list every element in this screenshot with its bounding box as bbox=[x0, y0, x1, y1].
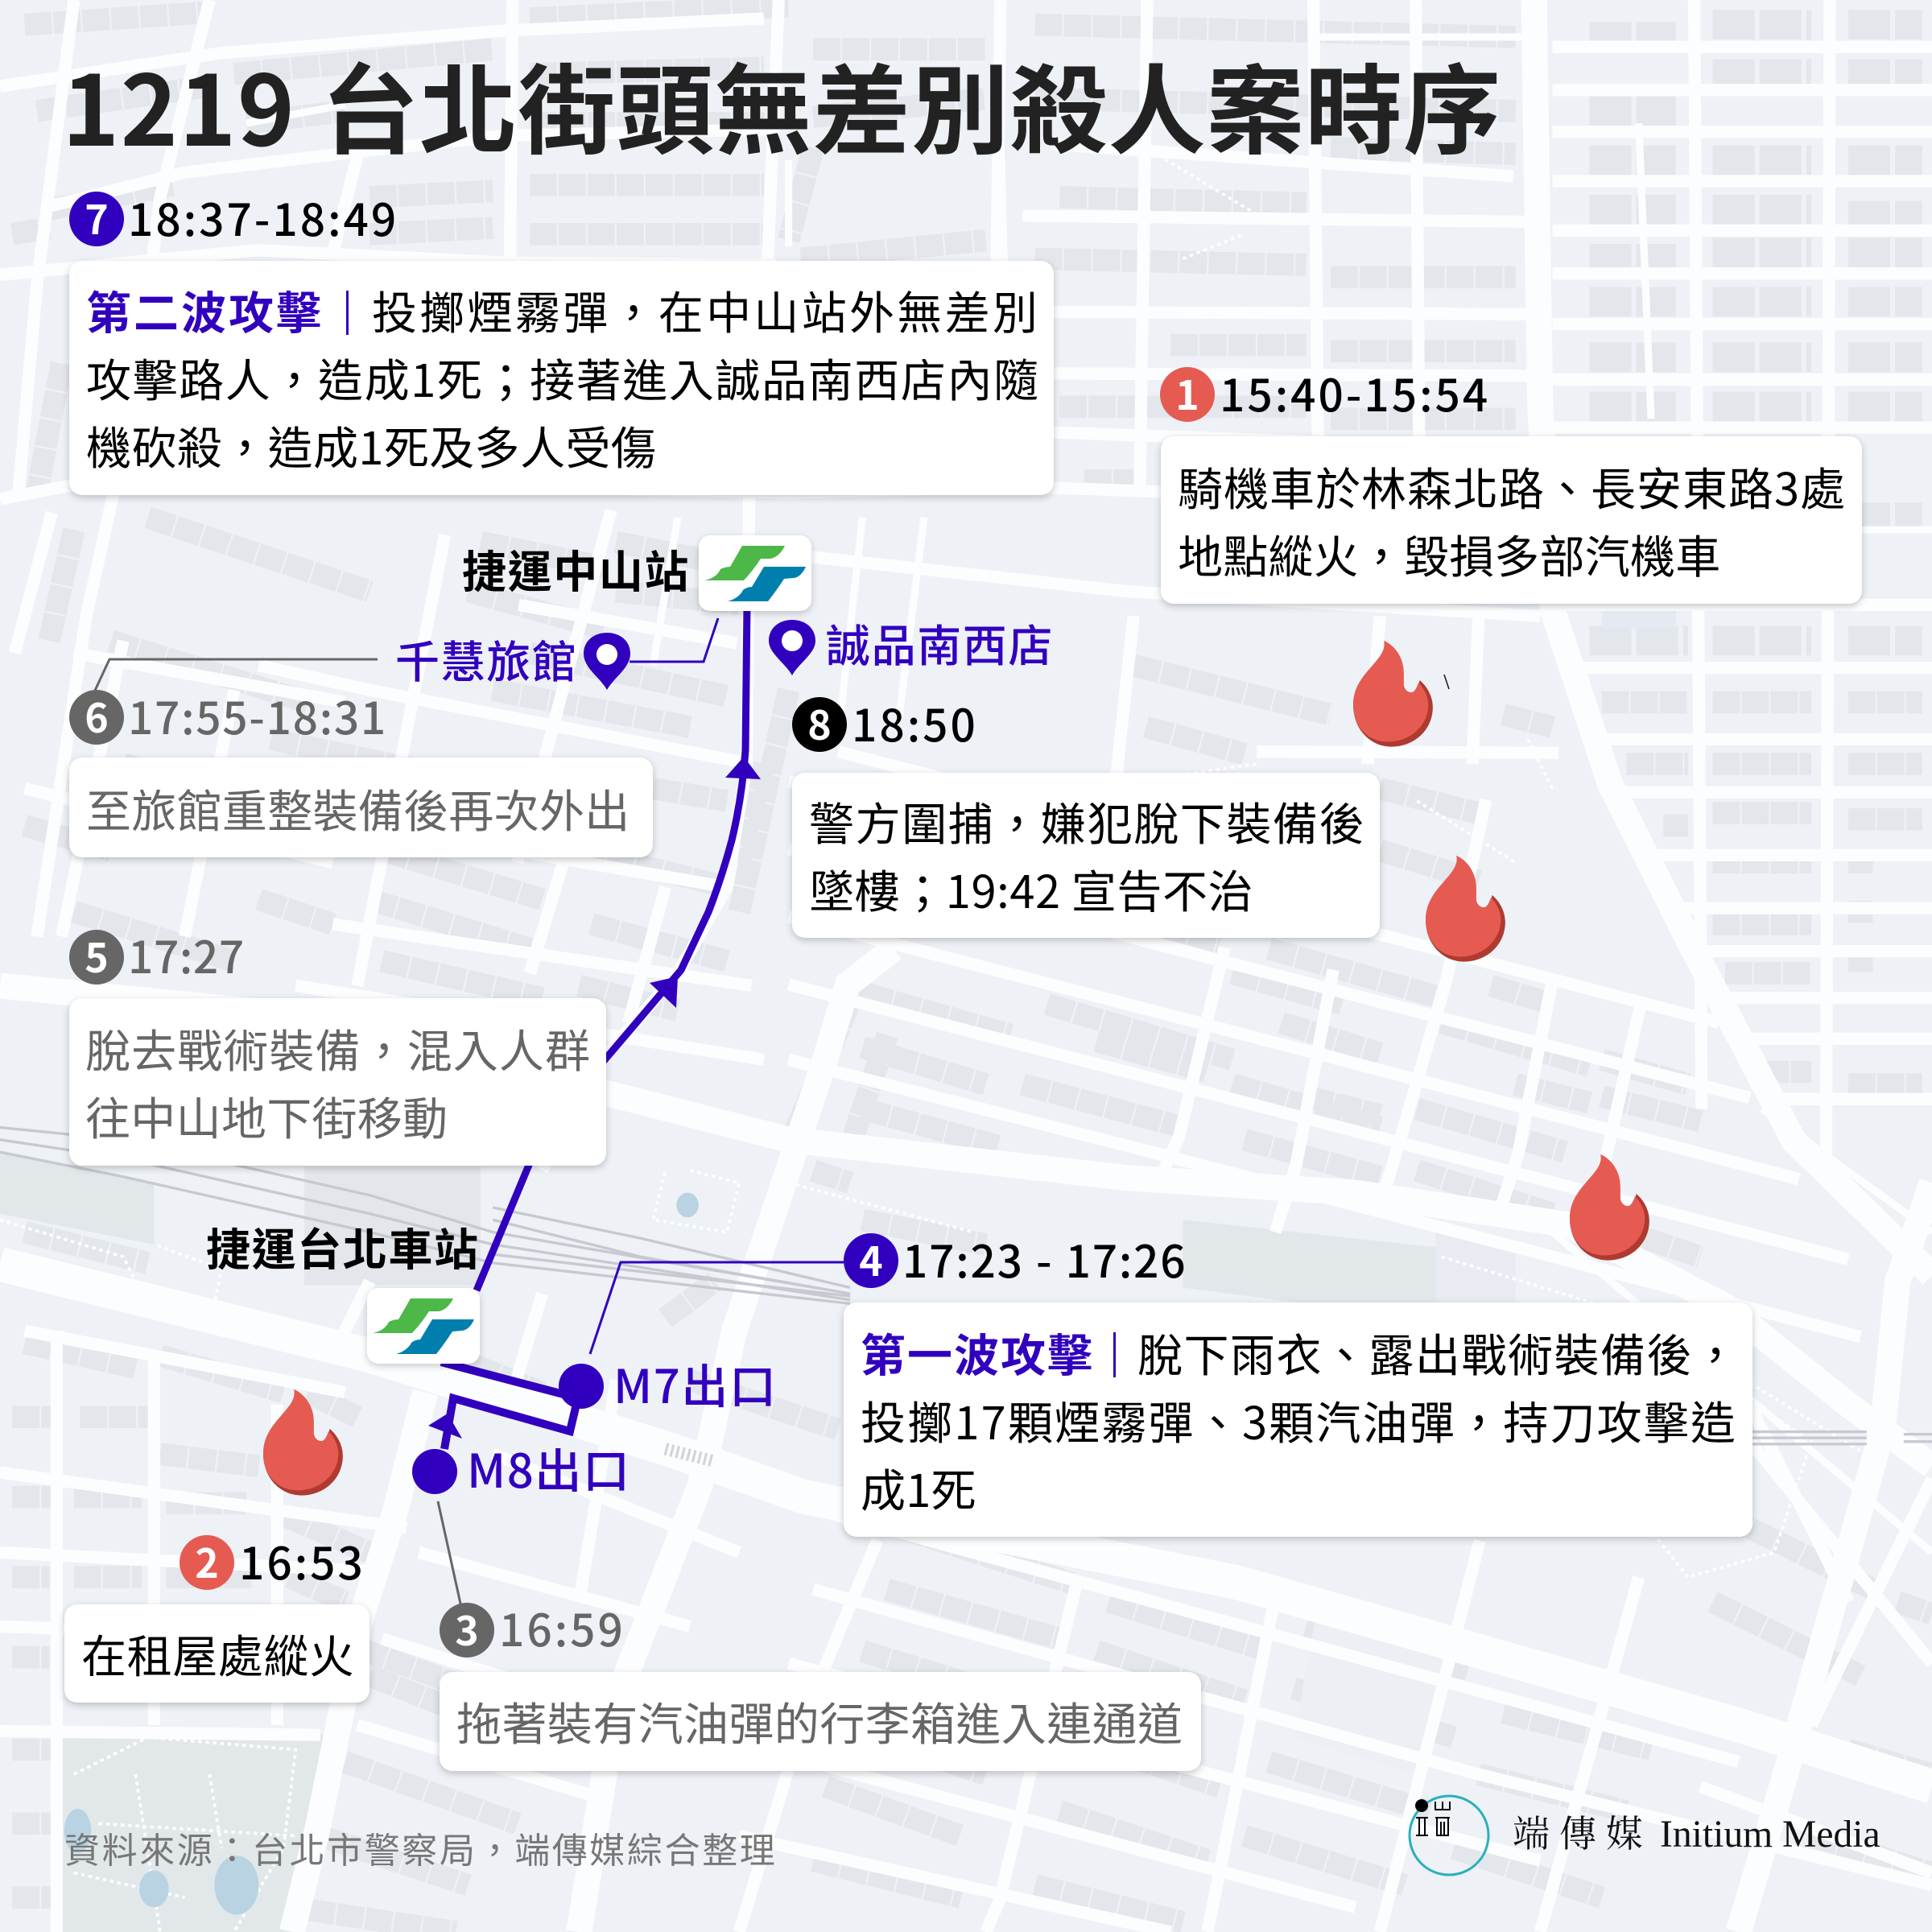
icon: hotel pin bbox=[584, 633, 630, 690]
icon: flame 4 bbox=[263, 1389, 343, 1496]
step 8 text line 1: 警方圍捕，嫌犯脫下裝備後 bbox=[809, 789, 1365, 854]
small stray stroke bbox=[1444, 675, 1449, 689]
panel: step 8 bbox=[789, 690, 1383, 943]
step 7 card bbox=[69, 261, 1054, 495]
place label: M8 exit: M8出口 bbox=[467, 1434, 631, 1501]
step 5 text line 2: 往中山地下街移動 bbox=[85, 1084, 448, 1149]
panel: step 4 bbox=[840, 1226, 1757, 1542]
step 4 badge: 4 bbox=[859, 1230, 883, 1288]
leader line: badge 3 to M8 exit bbox=[438, 1501, 460, 1604]
panel: step 2 bbox=[61, 1528, 374, 1708]
step 1 text line 2: 地點縱火，毀損多部汽機車 bbox=[1178, 522, 1720, 587]
step 5 card bbox=[69, 998, 606, 1166]
step 7 badge bbox=[69, 192, 124, 246]
step 4 text line 2: 投擲17顆煙霧彈、3顆汽油彈，持刀攻擊造 bbox=[861, 1388, 1737, 1453]
step 6 card bbox=[69, 758, 653, 857]
step 3 time: 16:59 bbox=[499, 1595, 625, 1659]
step 5 badge bbox=[69, 930, 124, 985]
step 2 text: 在租屋處縱火 bbox=[81, 1621, 355, 1686]
leader line: badge 4 to M7 exit bbox=[590, 1262, 844, 1354]
place label: M7 exit: M7出口 bbox=[613, 1349, 778, 1417]
logo: Initium Media bbox=[1409, 1795, 1880, 1876]
step 1 time: 15:40-15:54 bbox=[1220, 360, 1490, 424]
step 8 time: 18:50 bbox=[852, 690, 978, 754]
step 8 text line 2: 墜樓；19:42 宣告不治 bbox=[809, 857, 1253, 922]
icon: Eslite pin bbox=[769, 620, 815, 675]
step 4 time: 17:23 - 17:26 bbox=[902, 1226, 1187, 1290]
step 1 badge bbox=[1160, 367, 1215, 422]
step 5 badge: 5 bbox=[85, 927, 109, 985]
step 7 divider bbox=[346, 291, 349, 335]
station label: Zhongshan: 捷運中山站 bbox=[462, 536, 690, 601]
place label: hotel: 千慧旅館 bbox=[395, 626, 577, 691]
step 2 badge bbox=[180, 1535, 234, 1590]
step 8 card bbox=[792, 773, 1380, 938]
step 4 badge bbox=[844, 1233, 898, 1288]
step 3 badge bbox=[440, 1603, 494, 1657]
step 1 badge: 1 bbox=[1175, 364, 1199, 422]
step 4 text line 3: 成1死 bbox=[861, 1455, 976, 1521]
panel: step 7 bbox=[66, 184, 1058, 501]
step 4 text line 1: 脫下雨衣、露出戰術裝備後， bbox=[1137, 1320, 1739, 1385]
step 7 text line 1: 投擲煙霧彈，在中山站外無差別 bbox=[372, 278, 1040, 343]
station label: Taipei Main: 捷運台北車站 bbox=[206, 1214, 480, 1278]
step 8 badge: 8 bbox=[807, 694, 832, 752]
icon: flame 2 bbox=[1426, 856, 1505, 962]
panel: step 6 bbox=[66, 683, 657, 863]
icon: flame 1 bbox=[1353, 641, 1433, 747]
step 3 badge: 3 bbox=[455, 1600, 479, 1657]
place label: Eslite: 誠品南西店 bbox=[826, 610, 1054, 675]
panel: step 1 bbox=[1158, 360, 1866, 610]
panel: step 3 bbox=[436, 1595, 1204, 1777]
icon: Zhongshan metro logo bbox=[699, 535, 811, 611]
step 5 text line 1: 脫去戰術裝備，混入人群 bbox=[85, 1016, 591, 1081]
logo mark bbox=[1409, 1795, 1489, 1876]
step 2 time: 16:53 bbox=[239, 1528, 365, 1592]
step 7 text line 2: 攻擊路人，造成1死；接著進入誠品南西店內隨 bbox=[86, 345, 1040, 411]
step 8 badge bbox=[792, 697, 847, 752]
step 1 card bbox=[1161, 436, 1862, 604]
title: 1219 台北街頭無差別殺人案時序 bbox=[62, 33, 1501, 174]
step 4 heading: 第一波攻擊 bbox=[861, 1320, 1094, 1385]
step 4 card bbox=[844, 1302, 1752, 1537]
step 7 text line 3: 機砍殺，造成1死及多人受傷 bbox=[86, 413, 656, 478]
step 2 card bbox=[64, 1604, 369, 1703]
source: 資料來源：台北市警察局，端傳媒綜合整理 bbox=[64, 1822, 777, 1873]
icon: flame 3 bbox=[1570, 1154, 1649, 1261]
step 5 time: 17:27 bbox=[128, 922, 245, 986]
step 7 badge: 7 bbox=[85, 188, 109, 246]
step 6 time: 17:55-18:31 bbox=[128, 683, 387, 747]
route line: Taipei Main Station to Zhongshan bbox=[477, 604, 761, 1290]
step 6 badge: 6 bbox=[85, 687, 109, 745]
step 7 heading: 第二波攻擊 bbox=[86, 278, 324, 343]
step 6 text: 至旅館重整裝備後再次外出 bbox=[86, 776, 630, 841]
step 3 card bbox=[440, 1672, 1201, 1771]
route line: M8 exit to M7 exit bbox=[412, 1362, 604, 1494]
wordmark: 端傳媒 bbox=[1513, 1814, 1653, 1855]
step 2 badge: 2 bbox=[195, 1532, 219, 1590]
step 7 time: 18:37-18:49 bbox=[128, 184, 398, 249]
step 6 badge bbox=[69, 690, 124, 745]
step 1 text line 1: 騎機車於林森北路、長安東路3處 bbox=[1178, 454, 1846, 519]
step 3 text: 拖著裝有汽油彈的行李箱進入連通道 bbox=[456, 1689, 1183, 1754]
wordmark latin: Initium Media bbox=[1660, 1814, 1880, 1856]
panel: step 5 bbox=[66, 922, 610, 1172]
icon: Taipei Main metro logo bbox=[367, 1288, 480, 1364]
leader line: hotel pin to Zhongshan station bbox=[630, 618, 718, 662]
step 4 divider bbox=[1113, 1332, 1116, 1377]
leader line: badge 6 to hotel bbox=[93, 659, 378, 694]
